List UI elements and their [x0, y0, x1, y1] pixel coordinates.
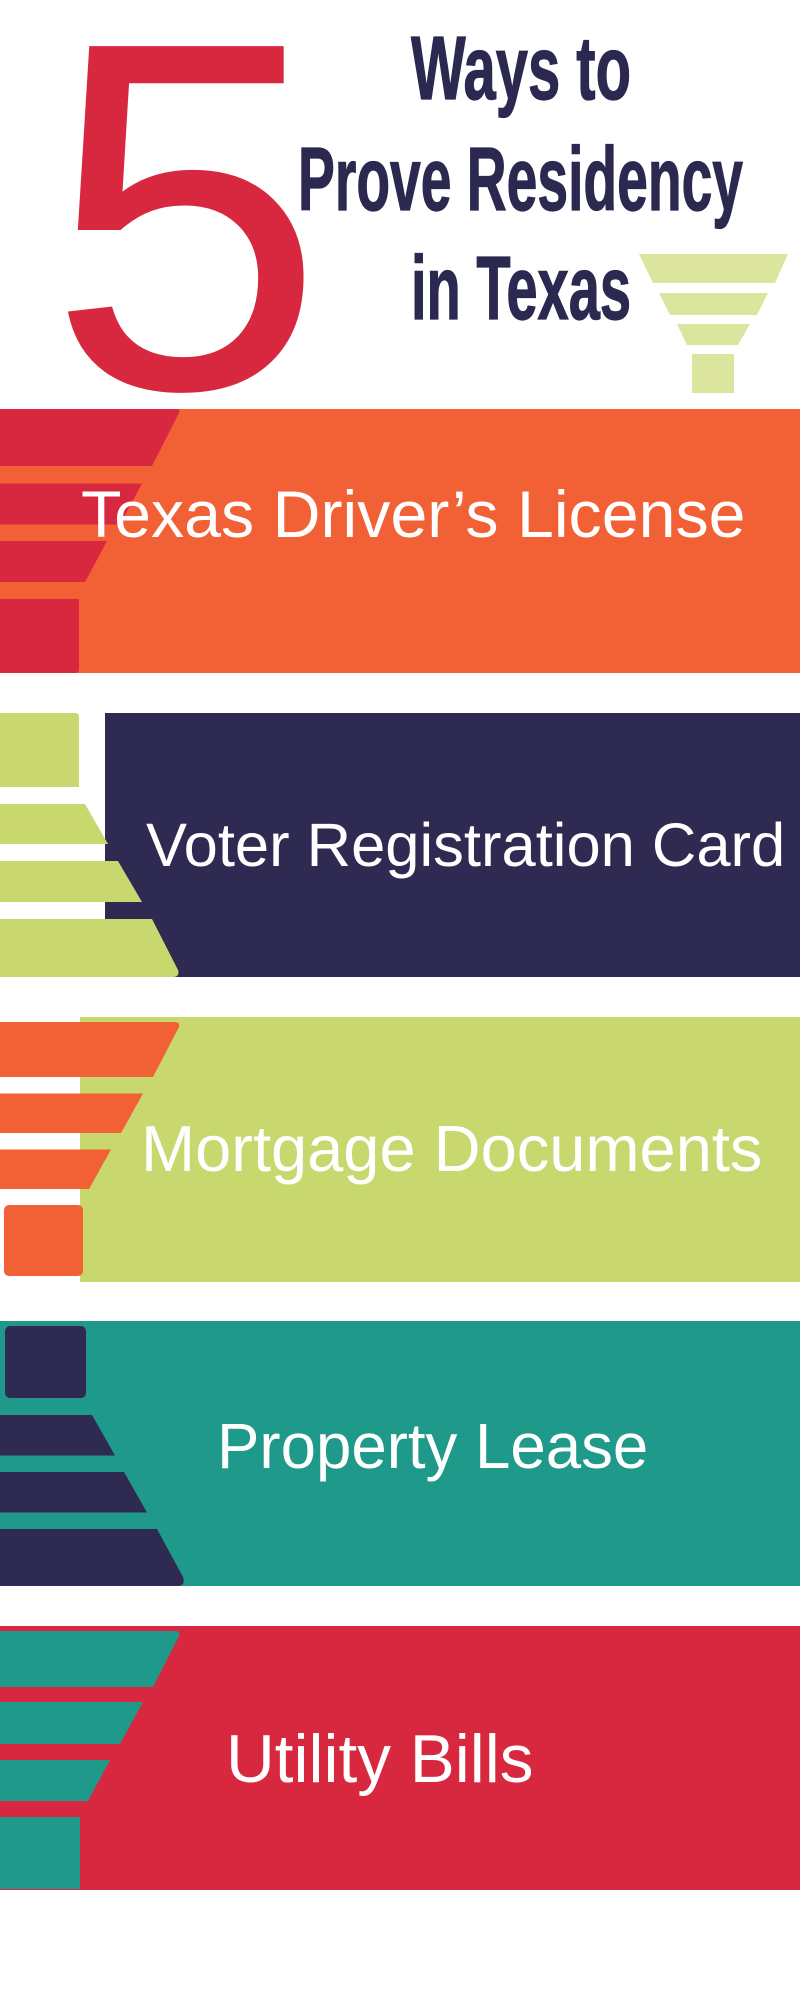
title: in Texas [411, 239, 631, 339]
label: Property Lease: Property Lease [217, 1411, 648, 1482]
icon: green funnel [0, 713, 178, 977]
panel: Utility Bills [0, 1626, 800, 1890]
panel: Voter Registration Card [0, 713, 800, 977]
icon: teal funnel [0, 1631, 179, 1889]
title [298, 19, 743, 339]
panel: Texas Driver's License [0, 409, 800, 673]
label: Mortgage Documents: Mortgage Documents [141, 1112, 762, 1185]
panel: Mortgage Documents [0, 1017, 800, 1282]
panel: Property Lease [0, 1321, 800, 1586]
icon: orange funnel [0, 1022, 179, 1276]
label: Utility Bills: Utility Bills [226, 1722, 534, 1797]
icon: red funnel [0, 409, 179, 673]
icon: navy funnel [0, 1326, 184, 1586]
title: Ways to [411, 19, 631, 119]
icon: small funnel [639, 254, 788, 393]
label: Texas Driver's License: Texas Driver’s License [81, 478, 745, 552]
label: Voter Registration Card: Voter Registration Card [146, 811, 785, 880]
